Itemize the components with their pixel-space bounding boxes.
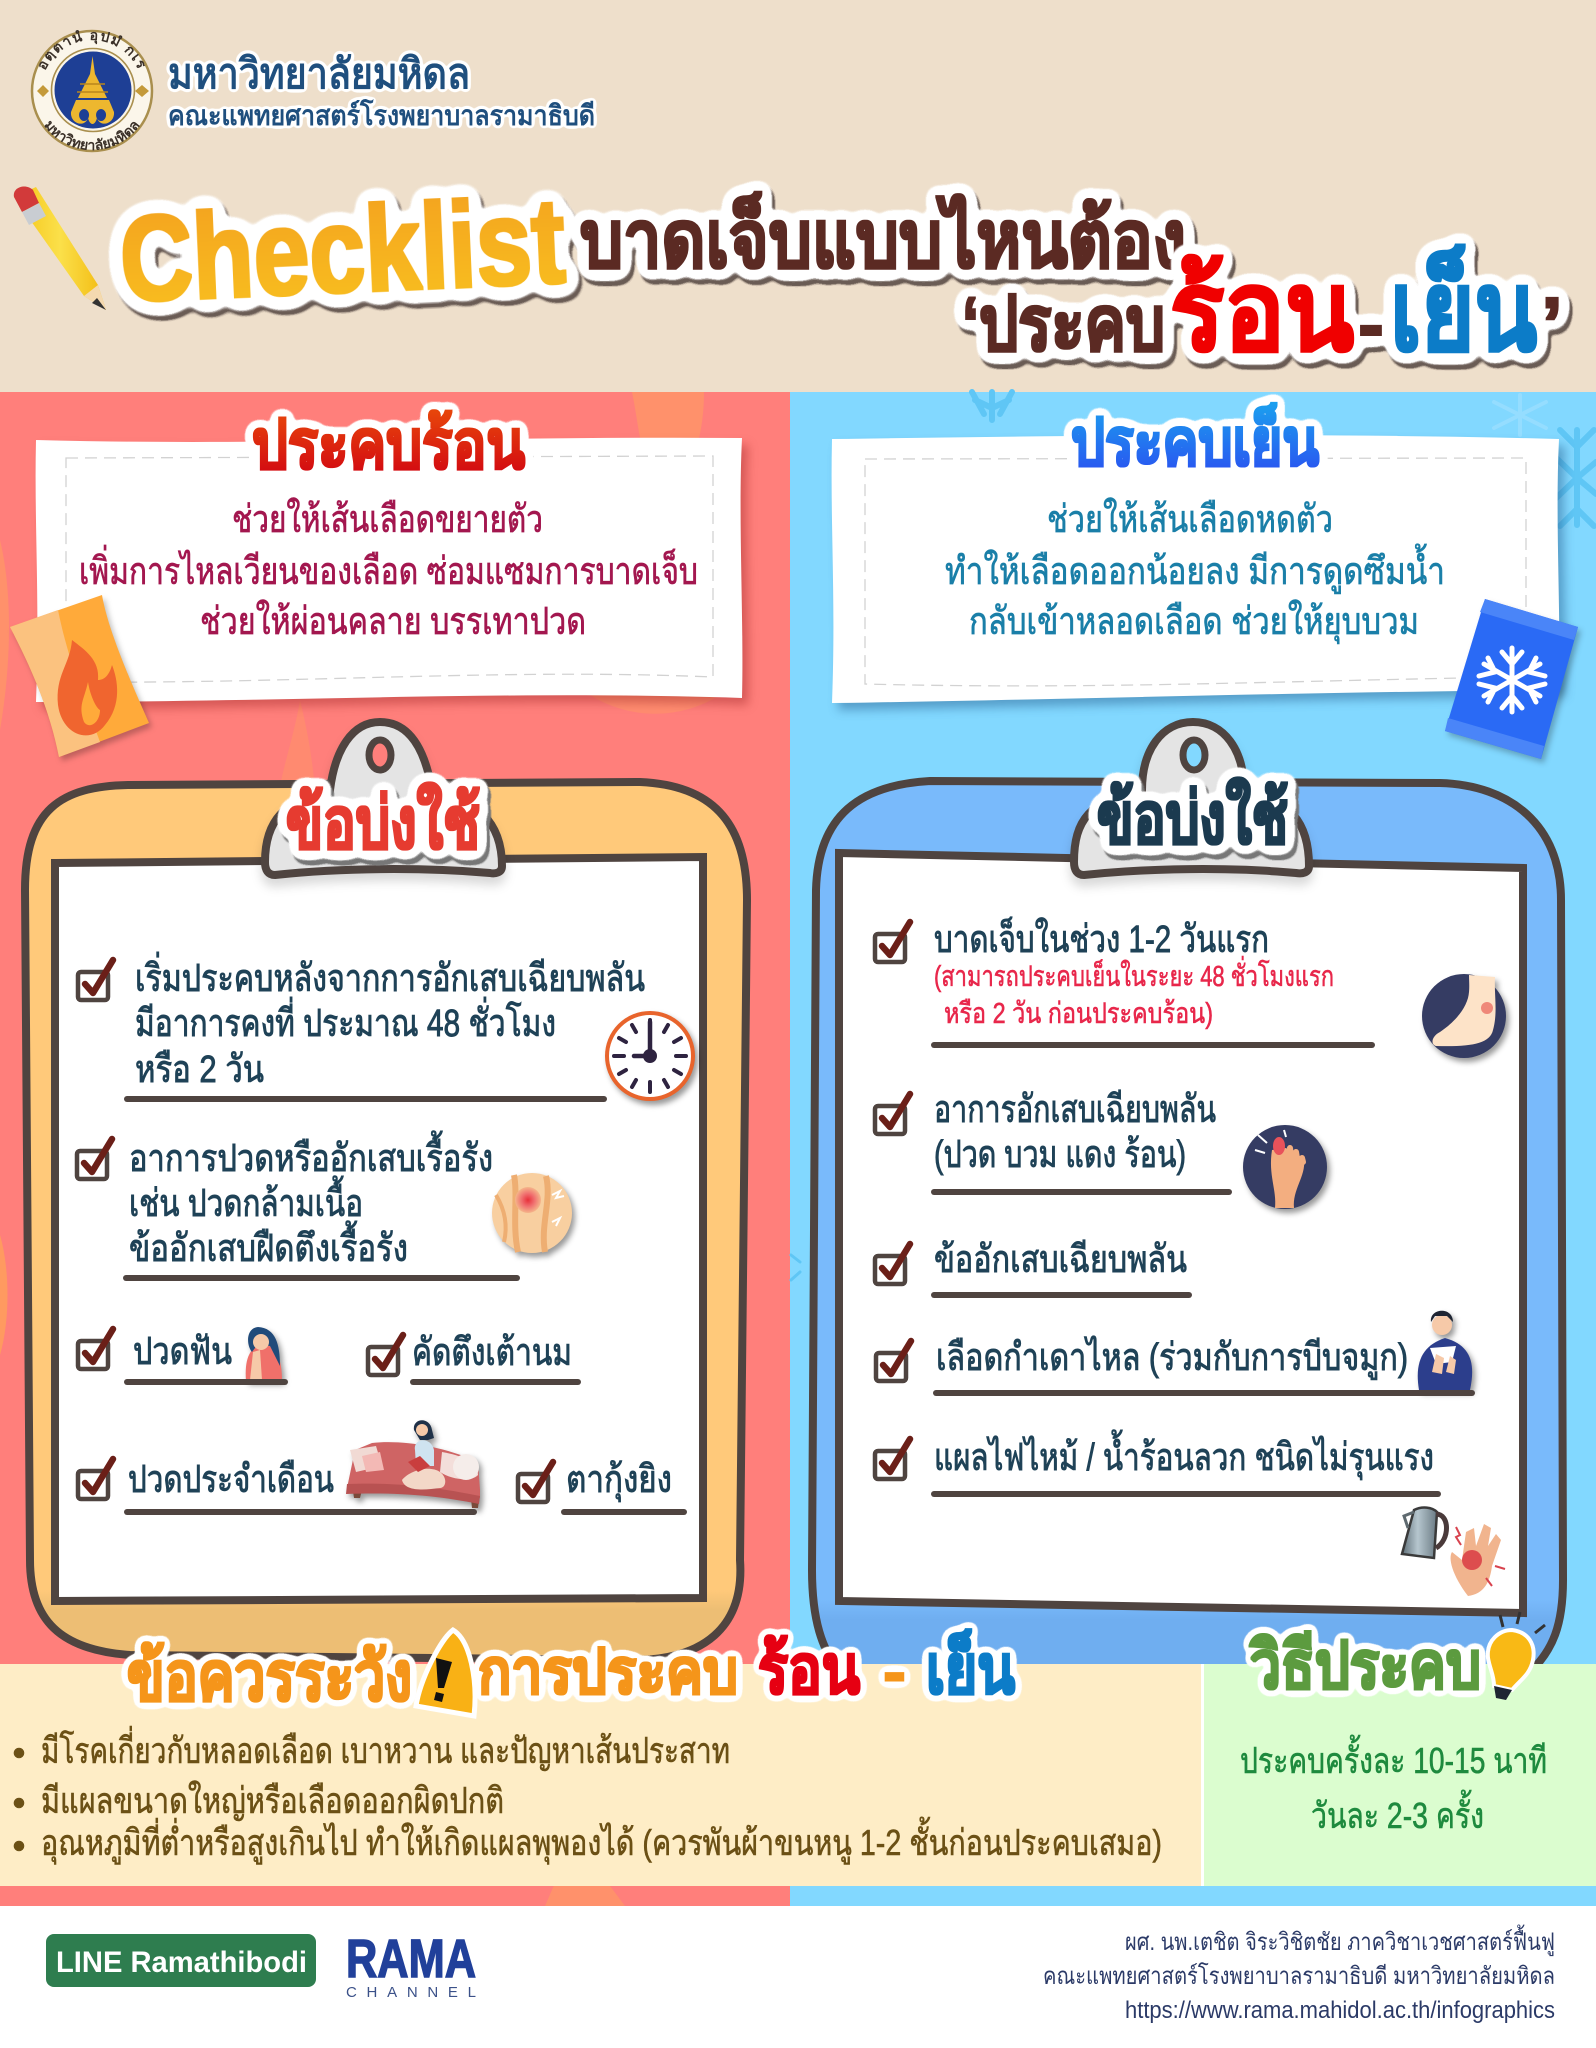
item: first days of injury: (สามารถประคบเย็นในระยะ 48 ชั่วโมงแรก bbox=[934, 956, 1334, 993]
text: cold compress benefits bbox=[945, 498, 1445, 644]
badge: LINE Ramathibodi: LINE Ramathibodi bbox=[56, 1946, 307, 1979]
item: nosebleed bbox=[876, 1311, 1472, 1393]
title: line 2: เย็น bbox=[1390, 244, 1537, 374]
heading: how to compress: วิธีประคบ bbox=[1249, 1628, 1481, 1702]
text: cold compress benefits: ช่วยให้เส้นเลือดหดตัว bbox=[1047, 498, 1333, 541]
item: acute inflammation: (ปวด บวม แดง ร้อน) bbox=[934, 1134, 1186, 1176]
heading: hot compress: ประคบร้อน bbox=[252, 407, 525, 483]
item: after acute inflammation: มีอาการคงที่ ประมาณ 48 ชั่วโมง bbox=[135, 997, 556, 1045]
panel: how to compress bbox=[1204, 1612, 1596, 1886]
white footer background bbox=[0, 1906, 1596, 2048]
list: precautions: อุณหภูมิที่ต่ำหรือสูงเกินไป ทำให้เกิดแผลพุพองได้ (ควรพันผ้าขนหนู 1-2 ชั้นก่อนประคบเสมอ) bbox=[41, 1816, 1162, 1865]
title: line 2: - bbox=[1358, 282, 1384, 367]
item: menstrual pain: ปวดประจำเดือน bbox=[128, 1459, 334, 1501]
text: duration and frequency: วันละ 2-3 ครั้ง bbox=[1311, 1789, 1484, 1836]
icon: heat pack bbox=[10, 595, 149, 757]
text: hot compress benefits: เพิ่มการไหลเวียนของเลือด ซ่อมแซมการบาดเจ็บ bbox=[79, 545, 698, 593]
item: acute inflammation bbox=[875, 1089, 1229, 1192]
item: chronic pain: เช่น ปวดกล้ามเนื้อ bbox=[129, 1175, 363, 1225]
title: line 1: บาดเจ็บแบบไหนต้อง bbox=[580, 191, 1186, 284]
university name: คณะแพทยศาสตร์โรงพยาบาลรามาธิบดี bbox=[168, 98, 595, 131]
item: breast engorgement: คัดตึงเต้านม bbox=[412, 1332, 572, 1374]
university name bbox=[168, 50, 595, 131]
item: nosebleed: เลือดกำเดาไหล (ร่วมกับการบีบจมูก) bbox=[936, 1336, 1408, 1380]
heading: indications: ข้อบ่งใช้ bbox=[286, 781, 480, 864]
heading: cold compress: ประคบเย็น bbox=[1071, 402, 1319, 479]
logo: Mahidol University seal: อตฺตานํ อุปมํ กเร bbox=[39, 30, 145, 70]
item: first days of injury: หรือ 2 วัน ก่อนประคบร้อน) bbox=[944, 998, 1213, 1030]
icon: injured ankle bbox=[1422, 974, 1506, 1058]
item: acute inflammation: อาการอักเสบเฉียบพลัน bbox=[934, 1089, 1216, 1131]
logo: RAMA Channel: RAMA bbox=[346, 1929, 476, 1989]
item: minor burns: แผลไฟไหม้ / น้ำร้อนลวก ชนิดไม่รุนแรง bbox=[934, 1429, 1434, 1480]
heading: compress hot cold bbox=[478, 1629, 1015, 1708]
item: chronic pain bbox=[77, 1130, 517, 1278]
heading: compress hot cold: การประคบ bbox=[478, 1638, 738, 1707]
item: chronic pain: ข้ออักเสบฝืดตึงเรื้อรัง bbox=[129, 1220, 408, 1270]
clipboard: cold compress indications bbox=[812, 722, 1563, 1672]
icon: inflamed knee bbox=[492, 1173, 572, 1253]
icon: cold pack bbox=[1445, 599, 1578, 759]
heading: compress hot cold: เย็น bbox=[926, 1629, 1015, 1708]
item: toothache: ปวดฟัน bbox=[133, 1331, 232, 1373]
item: after acute inflammation bbox=[78, 952, 645, 1099]
heading: compress hot cold: ร้อน bbox=[758, 1632, 860, 1708]
icon: light bulb bbox=[1488, 1612, 1545, 1700]
list: precautions bbox=[14, 1726, 1162, 1865]
heading: indications: ข้อบ่งใช้ bbox=[1097, 776, 1288, 859]
item: first days of injury: บาดเจ็บในช่วง 1-2 วันแรก bbox=[934, 916, 1269, 961]
background: cold side bbox=[790, 392, 1596, 1906]
item: chronic pain: อาการปวดหรืออักเสบเรื้อรัง bbox=[129, 1130, 493, 1180]
title bbox=[117, 172, 1563, 374]
clip bbox=[265, 722, 502, 875]
text: hot compress benefits: ช่วยให้ผ่อนคลาย บรรเทาปวด bbox=[200, 600, 586, 643]
text: hot compress benefits: ช่วยให้เส้นเลือดขยายตัว bbox=[232, 498, 543, 541]
title: line 2 bbox=[962, 244, 1563, 374]
icon: man with nosebleed bbox=[1418, 1311, 1472, 1390]
item: breast engorgement bbox=[368, 1332, 578, 1382]
item: minor burns bbox=[875, 1429, 1438, 1494]
item: first days of injury bbox=[875, 916, 1372, 1045]
badge: LINE Ramathibodi bbox=[46, 1934, 316, 1987]
logo: Mahidol University seal bbox=[30, 30, 154, 152]
title: line 2: ร้อน bbox=[1170, 249, 1354, 374]
icon: woman with toothache bbox=[246, 1327, 282, 1381]
panel: cold compress description bbox=[832, 402, 1559, 703]
clip bbox=[1074, 722, 1309, 875]
icon: kettle and burned hand bbox=[1402, 1508, 1505, 1596]
item: toothache bbox=[78, 1327, 285, 1382]
heading: compress hot cold: - bbox=[883, 1638, 906, 1707]
text: cold compress benefits: ทำให้เลือดออกน้อยลง มีการดูดซึมน้ำ bbox=[945, 543, 1445, 594]
item: menstrual pain bbox=[78, 1420, 480, 1512]
background: header band bbox=[0, 0, 1596, 392]
text: cold compress benefits: กลับเข้าหลอดเลือด ช่วยให้ยุบบวม bbox=[969, 600, 1419, 644]
item: acute arthritis bbox=[875, 1239, 1189, 1295]
panel: hot compress description bbox=[36, 407, 742, 702]
logo: RAMA Channel bbox=[346, 1929, 476, 2001]
text: duration and frequency bbox=[1240, 1734, 1547, 1836]
item: after acute inflammation: เริ่มประคบหลังจากการอักเสบเฉียบพลัน bbox=[135, 952, 645, 1000]
panel: precautions bbox=[0, 1629, 1596, 1886]
title: line 2: ‘ประคบ bbox=[962, 282, 1165, 367]
icon: inflamed toe bbox=[1243, 1125, 1327, 1209]
list: precautions: มีโรคเกี่ยวกับหลอดเลือด เบาหวาน และปัญหาเส้นประสาท bbox=[41, 1726, 730, 1771]
university name: มหาวิทยาลัยมหิดล bbox=[168, 50, 470, 97]
icon: clock bbox=[607, 1013, 693, 1099]
item: after acute inflammation: หรือ 2 วัน bbox=[135, 1049, 264, 1091]
title: Checklist: Checklist bbox=[117, 172, 568, 328]
credits bbox=[1043, 1924, 1555, 2024]
background: hot side bbox=[0, 392, 790, 1906]
clipboard: hot compress indications bbox=[25, 722, 747, 1660]
heading: precautions: ข้อควรระวัง bbox=[127, 1639, 412, 1715]
logo: Mahidol University seal: มหาวิทยาลัยมหิดล bbox=[44, 120, 140, 150]
list: precautions: มีแผลขนาดใหญ่หรือเลือดออกผิดปกติ bbox=[41, 1780, 504, 1821]
credits: https://www.rama.mahidol.ac.th/infographics bbox=[1125, 1997, 1555, 2024]
icon: pencil bbox=[14, 186, 106, 310]
text: hot compress benefits bbox=[79, 498, 698, 643]
item: acute arthritis: ข้ออักเสบเฉียบพลัน bbox=[934, 1239, 1187, 1281]
item: stye: ตากุ้งยิง bbox=[566, 1459, 672, 1502]
icon: warning sign bbox=[416, 1630, 475, 1716]
title: line 2: ’ bbox=[1541, 282, 1563, 367]
icon: woman on sofa bbox=[346, 1420, 480, 1508]
item: stye bbox=[518, 1459, 684, 1512]
logo: RAMA Channel: CHANNEL bbox=[346, 1984, 476, 2001]
